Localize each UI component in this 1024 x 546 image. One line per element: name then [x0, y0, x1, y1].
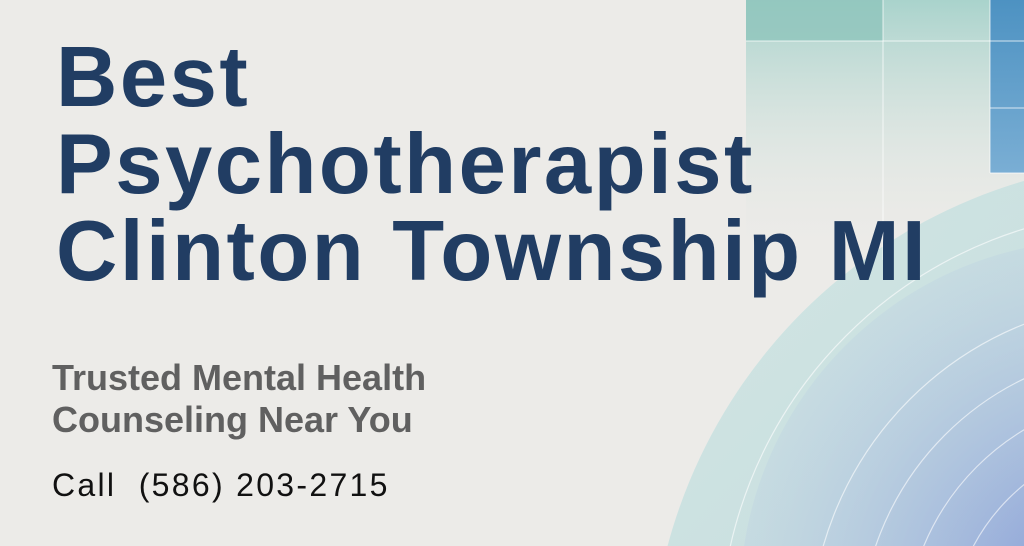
title: Clinton Township MI [56, 204, 928, 299]
title [56, 30, 928, 299]
subtitle: Trusted Mental Health [52, 357, 426, 398]
title: Psychotherapist [56, 117, 755, 212]
subtitle [52, 357, 426, 440]
subtitle: Counseling Near You [52, 399, 413, 440]
phone call line: Call (586) 203-2715 [52, 467, 390, 503]
title: Best [56, 30, 250, 125]
